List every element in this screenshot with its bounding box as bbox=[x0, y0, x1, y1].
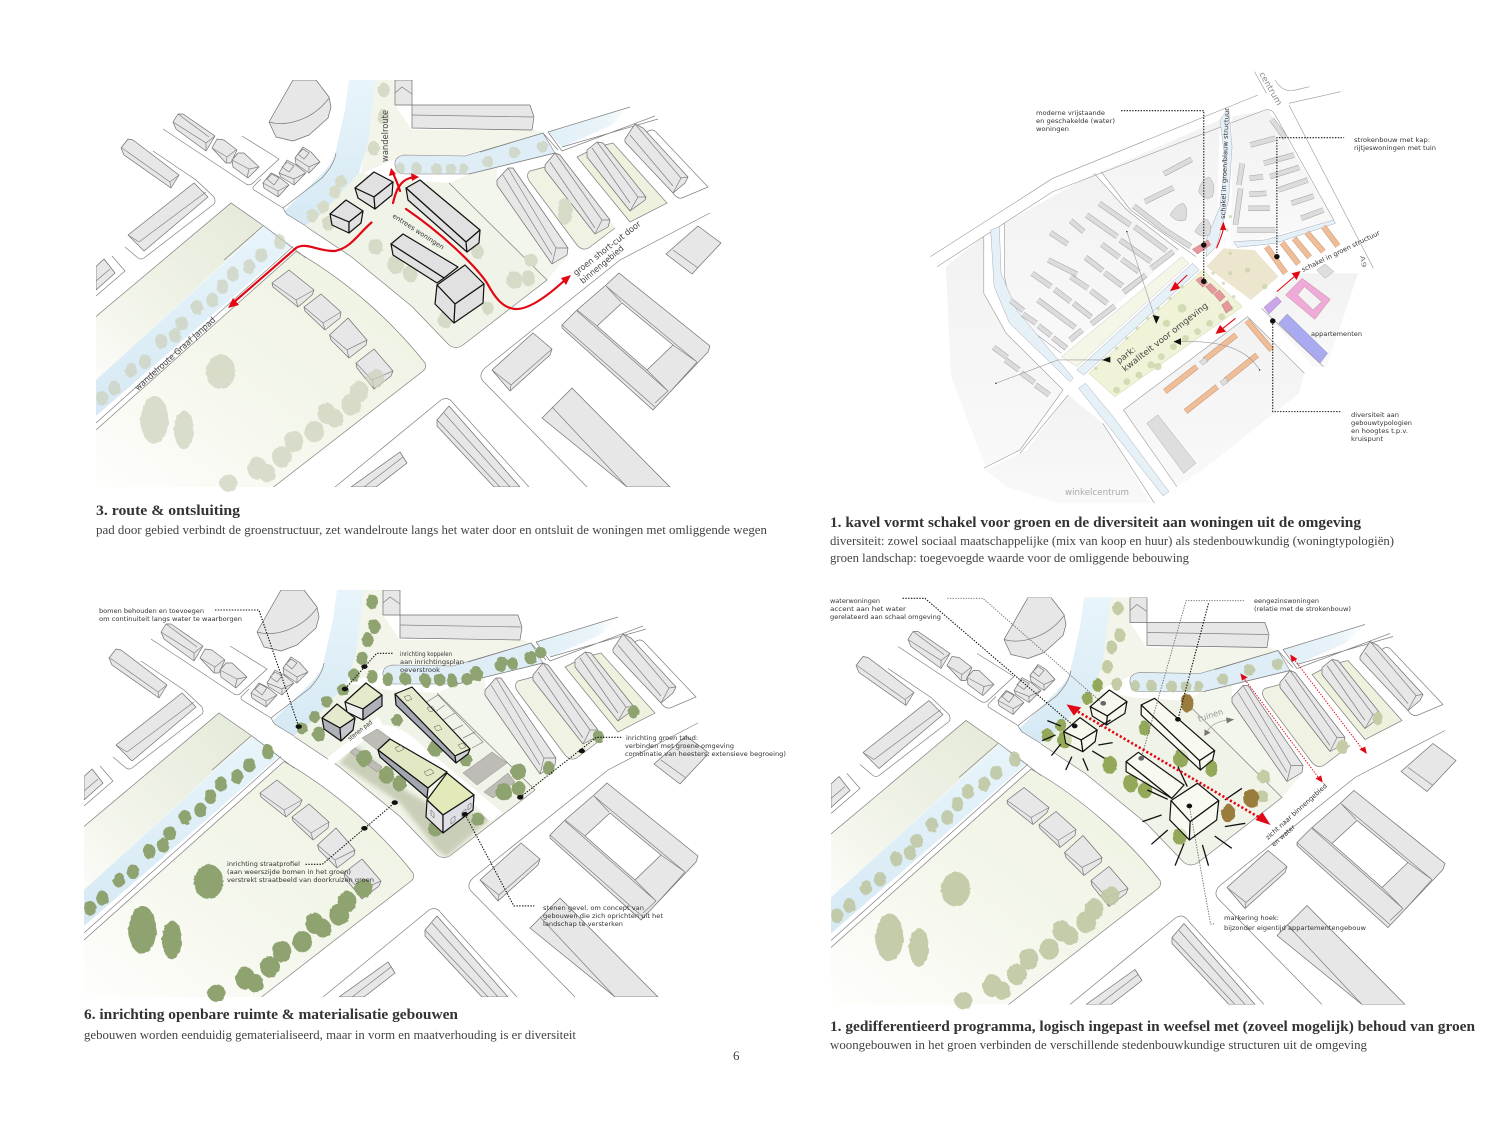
trees: muted surroundings bbox=[831, 658, 1284, 1009]
leader: talud bbox=[517, 737, 621, 800]
purple block bbox=[1264, 297, 1281, 314]
label: entrees woningen: entrees woningen bbox=[391, 212, 446, 251]
note: stenen gevel: stenen gevel, om concept van bbox=[543, 904, 644, 912]
label: en water: en water bbox=[1270, 823, 1297, 848]
program overlay bbox=[903, 598, 1383, 924]
base map: programma bbox=[831, 598, 1456, 1004]
note: moderne vrijstaande woningen: woningen bbox=[1036, 125, 1069, 133]
note: inrichting koppelen: inrichting koppelen bbox=[400, 650, 452, 658]
panel: 1 gedifferentieerd programma bbox=[830, 597, 1476, 1052]
note: stenen gevel: landschap te versterken bbox=[543, 920, 623, 928]
orange row houses bbox=[1165, 227, 1338, 412]
building outline: water house south bbox=[1064, 718, 1097, 752]
label: wandelroute: wandelroute bbox=[381, 110, 391, 162]
leader: bomen bbox=[215, 610, 302, 729]
label: A9: A9 bbox=[1358, 255, 1368, 268]
note: inrichting groen talud: inrichting groen talud: bbox=[626, 734, 698, 742]
autumn trees bbox=[1181, 694, 1260, 823]
pale trees bbox=[1102, 602, 1383, 803]
building: water house south bbox=[330, 200, 363, 233]
note: inrichting koppelen: aan inrichtingsplan bbox=[400, 658, 464, 666]
heading: route en ontsluiting: 3. route & ontsluiting bbox=[96, 503, 241, 519]
thin pointer lines and black arrowheads bbox=[995, 231, 1260, 384]
label: binnengebied: binnengebied bbox=[579, 244, 626, 286]
gray arrow: tuinen bbox=[1204, 717, 1234, 736]
sightline arrow: big red bbox=[1067, 704, 1271, 825]
note: inrichting straatprofiel: (aan weerszijde bomen in het groen) bbox=[227, 868, 351, 876]
note: moderne vrijstaande woningen: en geschakelde (water) bbox=[1036, 117, 1115, 125]
note: bomen behouden: om continuiteit langs water te waarborgen bbox=[99, 615, 242, 623]
note: inrichting straatprofiel: inrichting straatprofiel bbox=[227, 860, 300, 868]
building: long block bbox=[406, 180, 480, 252]
caption: diversiteit: diversiteit: zowel sociaal maatschappelijke (mix van koop en huur) als stedenbouwkundig (woningtypologiën) bbox=[830, 533, 1394, 548]
note: strokenbouw met kap: strokenbouw met kap: bbox=[1354, 136, 1430, 144]
note: inrichting groen talud: combinatie van heesters, extensieve begroeing) bbox=[625, 750, 786, 758]
note: appartementen: appartementen bbox=[1311, 330, 1362, 338]
surrounding gray blocks bbox=[946, 110, 1358, 503]
building: low wing bbox=[378, 739, 447, 798]
note: waterwoningen: waterwoningen bbox=[830, 597, 880, 605]
note: bomen behouden: bomen behouden en toevoegen bbox=[99, 607, 204, 615]
sand plot bbox=[1206, 248, 1279, 300]
trees: pale surroundings bbox=[96, 141, 549, 492]
leader: markering hoek bbox=[1186, 804, 1215, 924]
note: eengezinswoningen: (relatie met de strokenbouw) bbox=[1254, 605, 1351, 613]
red route bbox=[228, 168, 571, 309]
heading: inrichting openbare ruimte: 6. inrichting openbare ruimte & materialisatie gebouwen bbox=[84, 1007, 459, 1023]
label: zicht naar binnengebied: zicht naar binnengebied bbox=[1264, 782, 1329, 841]
building outline: low wing bbox=[1126, 752, 1184, 798]
caption: gebouwen: gebouwen worden eenduidig gematerialiseerd, maar in vorm en maatverhouding is er diversiteit bbox=[84, 1027, 576, 1042]
label: stenen pad: stenen pad bbox=[346, 718, 374, 743]
radiating accent strokes bbox=[1042, 720, 1245, 866]
heading: gedifferentieerd programma: 1. gedifferentieerd programma, logisch ingepast in weefsel met (zoveel mogelijk) behoud van groen bbox=[830, 1019, 1476, 1035]
building outline: corner tower bbox=[1170, 783, 1219, 840]
small gray buildings bbox=[1147, 264, 1334, 473]
leader lines bbox=[1121, 111, 1344, 412]
label: tuinen: tuinen bbox=[1197, 707, 1225, 725]
park bbox=[1089, 270, 1242, 397]
caption: woongebouwen: woongebouwen in het groen verbinden de verschillende stedenbouwkundige structuren uit de omgeving bbox=[830, 1037, 1367, 1052]
planted verge bbox=[340, 745, 492, 857]
base map: inrichting bbox=[84, 590, 709, 997]
building outline: water house north bbox=[1090, 690, 1127, 725]
label: schakel groen: schakel in groen structuur bbox=[1300, 229, 1381, 274]
context map bbox=[930, 72, 1373, 503]
note: inrichting straatprofiel: verstrekt straatbeeld van doorkruizen groen bbox=[227, 876, 374, 884]
green site trees bbox=[1042, 678, 1217, 845]
trees: green surroundings bbox=[84, 651, 537, 1002]
note: moderne vrijstaande woningen: moderne vrijstaande bbox=[1036, 109, 1105, 117]
caption: groen landschap: groen landschap: toegevoegde waarde voor de omliggende bebouwing bbox=[830, 550, 1189, 565]
label: kwaliteit voor omgeving: kwaliteit voor omgeving bbox=[1121, 301, 1210, 374]
label: groen short-cut door: groen short-cut door bbox=[572, 219, 644, 278]
panel: 6 inrichting openbare ruimte bbox=[84, 590, 786, 1042]
page number: 6 bbox=[733, 1048, 740, 1063]
building outline: long block bbox=[1141, 698, 1215, 770]
building: water house north bbox=[345, 683, 382, 720]
building: water house south bbox=[322, 704, 355, 741]
pink new houses bbox=[1192, 240, 1232, 313]
gray housing bars bbox=[993, 119, 1323, 395]
site trees bbox=[296, 594, 639, 836]
note: strokenbouw met kap: rijtjeswoningen met tuin bbox=[1354, 144, 1436, 152]
label: schakel groen/blauw: schakel in groen/blauw structuur bbox=[1219, 108, 1231, 219]
base map: route bbox=[96, 80, 721, 487]
caption: route: pad door gebied verbindt de groenstructuur, zet wandelroute langs het water door en ontsluit de woningen met omliggende wegen bbox=[96, 522, 767, 537]
white paths bbox=[327, 717, 503, 822]
sightline arrows: gardens bbox=[1240, 654, 1367, 783]
parking slots bbox=[425, 695, 483, 748]
note: markering hoek: markering hoek: bbox=[1224, 914, 1279, 922]
park trees bbox=[1094, 215, 1268, 393]
note: stenen gevel: gebouwen die zich oprichten uit het bbox=[543, 912, 663, 920]
pink courtyard block bbox=[1285, 278, 1330, 319]
note: inrichting koppelen: oeverstrook bbox=[400, 666, 440, 674]
building: corner tower bbox=[435, 265, 484, 323]
site trees bbox=[307, 83, 573, 328]
canals bbox=[991, 108, 1335, 496]
leader: straatprofiel bbox=[306, 800, 398, 864]
road lines bbox=[930, 72, 1373, 503]
note: waterwoningen: accent aan het water bbox=[830, 605, 906, 613]
building: long block bbox=[395, 687, 470, 763]
note: diversiteit aan gebouwtypologien: kruispunt bbox=[1351, 435, 1383, 443]
red direction arrows bbox=[1170, 222, 1301, 334]
leader: gevel bbox=[462, 812, 534, 906]
blue apartments bbox=[1279, 314, 1328, 363]
note: waterwoningen: gerelateerd aan schaal omgeving bbox=[830, 613, 941, 621]
leaders: waterwoningen bbox=[903, 598, 1106, 728]
note: markering hoek: bijzonder eigentijd appartementengebouw bbox=[1224, 924, 1367, 932]
parking fields bbox=[350, 729, 515, 798]
note: inrichting groen talud: verbinden met groene omgeving bbox=[625, 742, 734, 750]
label: park: park: bbox=[1115, 345, 1138, 366]
building: water house north bbox=[355, 172, 393, 209]
building: low wing bbox=[391, 234, 458, 283]
note: eengezinswoningen: eengezinswoningen bbox=[1254, 597, 1319, 605]
label: wandelroute Graaf Janpad: wandelroute Graaf Janpad bbox=[133, 316, 218, 393]
label: winkelcentrum: winkelcentrum bbox=[1065, 488, 1129, 498]
leaders bbox=[215, 610, 621, 906]
panel: 1 kavel vormt schakel bbox=[830, 70, 1436, 565]
leader: koppelen bbox=[342, 653, 393, 691]
panel: 3 route en ontsluiting bbox=[96, 80, 767, 537]
heading: kavel vormt schakel: 1. kavel vormt schakel voor groen en de diversiteit aan woningen uit de omgeving bbox=[830, 515, 1362, 531]
leaders: eengezinswoningen bbox=[1138, 601, 1244, 761]
note: diversiteit aan gebouwtypologien: diversiteit aan bbox=[1351, 411, 1399, 419]
green strip bbox=[1061, 257, 1189, 367]
note: diversiteit aan gebouwtypologien: en hoogtes t.p.v. bbox=[1351, 427, 1408, 435]
building: corner tower bbox=[426, 773, 474, 833]
round towers bbox=[1170, 177, 1214, 236]
note: diversiteit aan gebouwtypologien: gebouwtypologien bbox=[1351, 419, 1412, 427]
label: centrum: centrum bbox=[1256, 70, 1284, 108]
